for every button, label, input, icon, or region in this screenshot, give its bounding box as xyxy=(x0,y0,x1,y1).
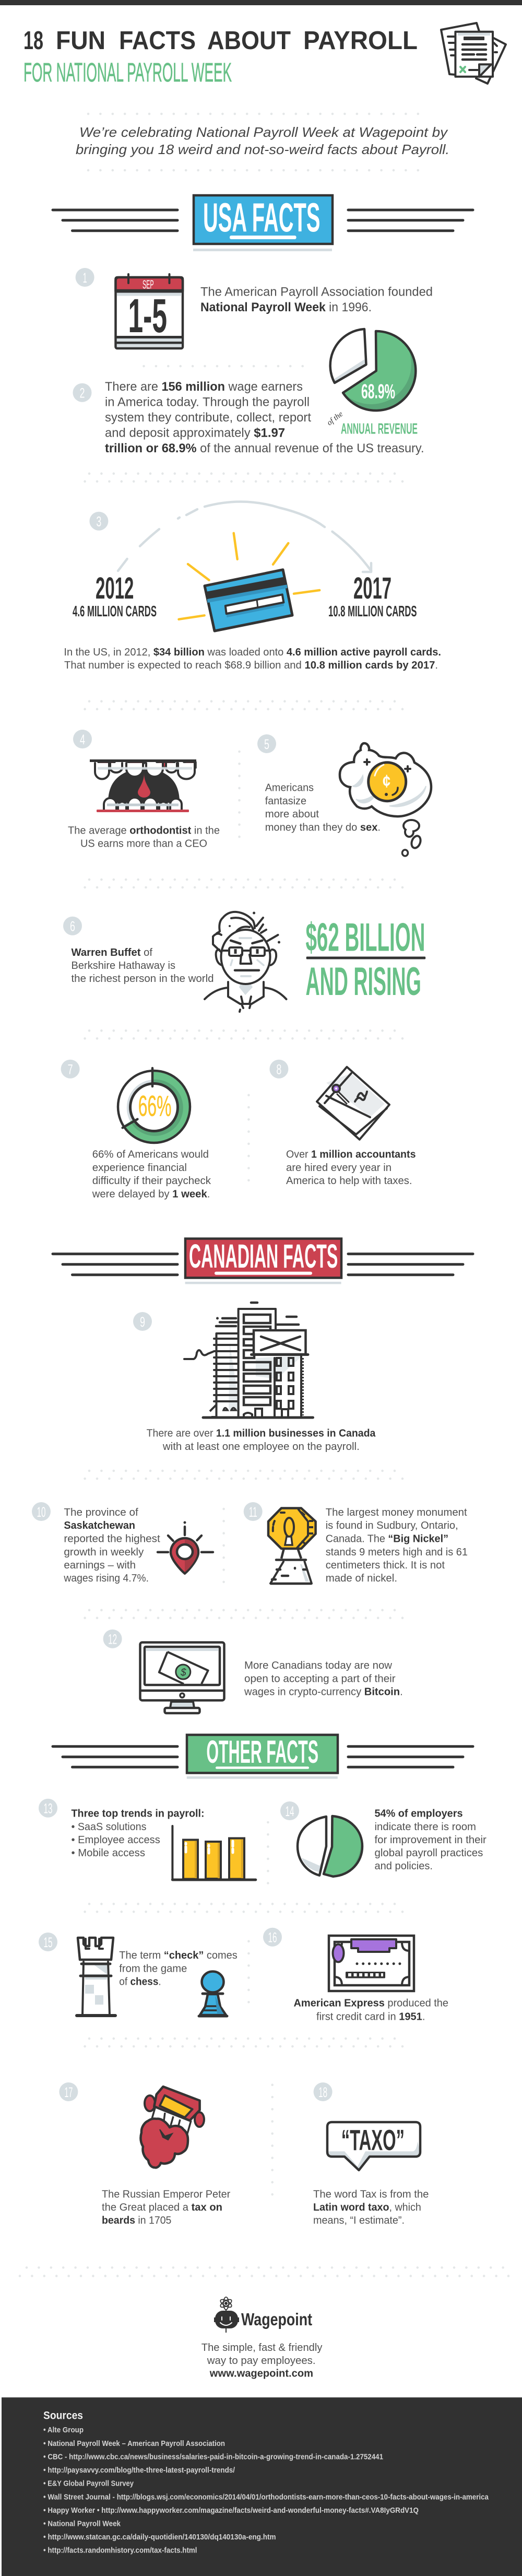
panel: fact 13 xyxy=(39,1799,256,1880)
fact 2 text: system they contribute, collect, report xyxy=(105,411,311,425)
heading: Canadian facts: CANADIAN FACTS xyxy=(189,1237,338,1275)
fact 10 text: The province of xyxy=(64,1506,138,1518)
heading: Canadian facts xyxy=(53,1237,473,1284)
logo: Wagepoint xyxy=(214,2297,312,2333)
chart: pie 68.9%: 68.9% xyxy=(361,381,395,403)
panel: fact 15 xyxy=(39,1933,238,2016)
fact 4 text xyxy=(68,825,220,850)
heading: Other facts: OTHER FACTS xyxy=(206,1734,318,1770)
badge 15: 15 xyxy=(44,1935,52,1950)
title: ABOUT xyxy=(207,27,291,55)
intro text: We’re celebrating National Payroll Week at Wagepoint by xyxy=(79,124,448,140)
icon: monitor with banknote xyxy=(140,1642,224,1713)
top bar xyxy=(0,0,522,5)
badge 6: 6 xyxy=(70,919,75,934)
caption: of the annual revenue: ANNUAL REVENUE xyxy=(341,421,418,438)
icon: office buildings xyxy=(184,1303,313,1418)
fact 17 text xyxy=(102,2188,230,2227)
icon: big nickel monument xyxy=(268,1508,316,1584)
chart: pie 68.9% xyxy=(330,324,416,411)
title xyxy=(23,27,418,55)
fact 16 text: first credit card in 1951. xyxy=(316,2010,425,2022)
fact 3 text: That number is expected to reach $68.9 billion and 10.8 million cards by 2017. xyxy=(64,659,438,671)
panel: fact 4 xyxy=(68,730,220,850)
icon: calendar: SEP xyxy=(143,278,154,291)
fact 2 text: and deposit approximately $1.97 xyxy=(105,426,285,440)
fact 16 text: American Express produced the xyxy=(293,1997,448,2009)
fact 11 text: centimeters thick. It is not xyxy=(326,1559,445,1571)
fact 14 text: and policies. xyxy=(375,1860,433,1872)
arrow: growth arc xyxy=(118,501,371,572)
fact 11 text xyxy=(326,1506,468,1584)
icon: Warren Buffett portrait xyxy=(205,912,286,1012)
icon: monitor with banknote: $ xyxy=(180,1667,186,1678)
fact 11 text: is found in Sudbury, Ontario, xyxy=(326,1519,458,1531)
badge 14: 14 xyxy=(285,1804,294,1819)
icon: speech bubble TAXO: “TAXO” xyxy=(341,2124,405,2157)
badge 4: 4 xyxy=(80,732,85,747)
badge 14 xyxy=(280,1801,299,1820)
panel: fact 14 xyxy=(280,1801,487,1878)
fact 11 text: The largest money monument xyxy=(326,1506,467,1518)
fact 6 text: Warren Buffet of xyxy=(71,946,152,958)
fact 17 text: the Great placed a tax on xyxy=(102,2202,222,2214)
fact 7 text: were delayed by 1 week. xyxy=(92,1188,210,1200)
icon: bearded tsar xyxy=(140,2087,204,2168)
badge 8: 8 xyxy=(276,1062,281,1078)
label: 2017 xyxy=(328,571,417,620)
fact 17 text: The Russian Emperor Peter xyxy=(102,2188,230,2200)
panel: fact 3 xyxy=(64,501,441,671)
fact 7 text: 66% of Americans would xyxy=(92,1149,209,1161)
fact 12 text: open to accepting a part of their xyxy=(244,1672,396,1685)
sources list: • http://www.statcan.gc.ca/daily-quotidien/140130/dq140130a-eng.htm xyxy=(43,2533,276,2542)
sources list: • E&Y Global Payroll Survey xyxy=(43,2479,134,2488)
panel: fact 10 xyxy=(32,1502,213,1584)
panel: fact 16 xyxy=(263,1928,448,2022)
icon: thought cloud with coin: ¢ xyxy=(383,771,390,791)
intro text xyxy=(76,124,449,157)
sources list: • http://paysavvy.com/blog/the-three-latest-payroll-trends/ xyxy=(43,2466,235,2475)
icon: checkbook xyxy=(317,1067,389,1140)
sources list: • CBC - http://www.cbc.ca/news/business/salaries-paid-in-bitcoin-a-growing-trend-in-canada-1.2752441 xyxy=(43,2453,383,2461)
title: 18 xyxy=(23,27,43,55)
fact 15 text: of chess. xyxy=(119,1976,161,1988)
badge 9: 9 xyxy=(140,1314,145,1330)
label: 2012 xyxy=(73,571,157,620)
fact 2 text xyxy=(105,380,424,455)
sources list: • National Payroll Week – American Payroll Association xyxy=(43,2439,225,2448)
fact 13 text: Three top trends in payroll: xyxy=(71,1807,205,1819)
badge 12: 12 xyxy=(108,1632,117,1647)
badge 7: 7 xyxy=(68,1062,73,1078)
badge 8 xyxy=(269,1060,288,1079)
label: 2017: 2017 xyxy=(353,571,392,605)
title: PAYROLL xyxy=(303,27,418,55)
panel: fact 5 xyxy=(257,734,431,856)
badge 5: 5 xyxy=(264,736,269,752)
fact 14 text: for improvement in their xyxy=(375,1834,487,1846)
badge 13 xyxy=(39,1799,57,1818)
chart: donut 66% xyxy=(118,1068,190,1143)
badge 16: 16 xyxy=(268,1930,277,1946)
fact 10 text: earnings – with xyxy=(64,1559,136,1571)
sources list xyxy=(43,2426,489,2555)
panel: fact 17 xyxy=(59,2082,230,2227)
badge 3 xyxy=(89,512,108,531)
fact 3 text xyxy=(64,646,441,671)
fact 1 text xyxy=(200,285,433,314)
fact 15 text: The term “check” comes xyxy=(119,1949,238,1961)
fact 2 text: There are 156 million wage earners xyxy=(105,380,303,394)
fact 5 text: money than they do sex. xyxy=(265,821,381,833)
fact 6 text xyxy=(71,946,214,985)
fact 10 text: Saskatchewan xyxy=(64,1519,135,1531)
panel: fact 8 xyxy=(269,1060,416,1187)
badge 16 xyxy=(263,1928,282,1947)
fact 9 text: There are over 1.1 million businesses in Canada xyxy=(147,1427,376,1439)
fact 14 text: indicate there is room xyxy=(375,1821,476,1833)
fact 1 text: National Payroll Week in 1996. xyxy=(200,300,372,314)
fact 15 text: from the game xyxy=(119,1962,187,1974)
panel: fact 9 xyxy=(133,1303,376,1453)
badge 18: 18 xyxy=(318,2085,327,2100)
label: 2012: 4.6 MILLION CARDS xyxy=(73,603,157,620)
title: FACTS xyxy=(119,27,196,55)
label: 2012: 2012 xyxy=(96,571,134,605)
badge 13: 13 xyxy=(44,1801,52,1817)
logo: Wagepoint: Wagepoint xyxy=(241,2310,312,2329)
panel: fact 18 xyxy=(313,2082,429,2227)
badge 1: 1 xyxy=(83,270,87,286)
fact 4 text: US earns more than a CEO xyxy=(80,838,207,850)
sources heading: Sources xyxy=(43,2409,83,2421)
heading: Other facts xyxy=(53,1734,473,1779)
subtitle: FOR NATIONAL PAYROLL WEEK xyxy=(23,57,232,87)
panel: fact 7 xyxy=(61,1060,211,1200)
icon: thought cloud with coin xyxy=(340,743,431,856)
fact 2 text: in America today. Through the payroll xyxy=(105,395,310,409)
fact 10 text: wages rising 4.7%. xyxy=(63,1572,149,1584)
fact 4 text: The average orthodontist in the xyxy=(68,825,220,837)
fact 5 text: fantasize xyxy=(265,795,306,807)
fact 17 text: beards in 1705 xyxy=(102,2215,171,2227)
panel: fact 12 xyxy=(103,1630,403,1713)
badge 15 xyxy=(39,1933,57,1951)
chart: pie 54% xyxy=(296,1814,363,1878)
fact 13 text: • Employee access xyxy=(71,1834,160,1846)
badge 3: 3 xyxy=(96,514,101,530)
closing tagline xyxy=(201,2341,323,2380)
fact 13 text xyxy=(71,1807,205,1859)
fact 18 text: The word Tax is from the xyxy=(313,2188,429,2200)
fact 9 text: with at least one employee on the payroll. xyxy=(162,1441,360,1453)
fact 11 text: stands 9 meters high and is 61 xyxy=(326,1546,468,1558)
badge 6 xyxy=(63,917,82,935)
chart: donut 66%: 66% xyxy=(138,1090,171,1122)
panel: fact 6 xyxy=(63,912,425,1012)
icon: first credit card certificate xyxy=(329,1936,414,1991)
fact 13 text: • SaaS solutions xyxy=(71,1821,146,1833)
fact 5 text: more about xyxy=(265,808,319,820)
fact 18 text: Latin word taxo, which xyxy=(313,2202,421,2214)
badge 9 xyxy=(133,1312,152,1331)
fact 12 text: wages in crypto-currency Bitcoin. xyxy=(244,1686,403,1698)
badge 7 xyxy=(61,1060,80,1079)
label: 2017: 10.8 MILLION CARDS xyxy=(328,603,417,620)
heading: USA facts: USA FACTS xyxy=(203,194,321,240)
fact 3 text: In the US, in 2012, $34 billion was loaded onto 4.6 million active payroll cards. xyxy=(64,646,441,658)
badge 2 xyxy=(73,383,92,402)
sources list: • Alte Group xyxy=(43,2426,84,2434)
icon: calendar: 1-5 xyxy=(128,289,167,343)
badge 12 xyxy=(103,1630,122,1648)
fact 18 text: means, “I estimate”. xyxy=(313,2215,405,2227)
fact 9 text xyxy=(147,1427,376,1453)
badge 11 xyxy=(244,1502,263,1521)
callout: $62 billion and rising xyxy=(306,916,425,1004)
fact 11 text: Canada. The “Big Nickel” xyxy=(326,1532,448,1545)
caption: of the annual revenue xyxy=(326,410,418,438)
icon: rook xyxy=(77,1938,115,2016)
sources list: • National Payroll Week xyxy=(43,2519,121,2528)
fact 8 text xyxy=(286,1149,416,1187)
fact 12 text xyxy=(244,1659,403,1698)
fact 1 text: The American Payroll Association founded xyxy=(200,285,433,299)
title: FUN xyxy=(56,27,105,55)
fact 5 text: Americans xyxy=(265,782,314,794)
badge 5 xyxy=(257,734,276,753)
badge 10 xyxy=(32,1502,51,1521)
panel: fact 1 xyxy=(76,268,433,348)
intro text: bringing you 18 weird and not-so-weird facts about Payroll. xyxy=(76,142,449,157)
fact 16 text xyxy=(293,1997,448,2022)
fact 13 text: • Mobile access xyxy=(71,1847,145,1859)
fact 8 text: America to help with taxes. xyxy=(286,1175,412,1187)
badge 17 xyxy=(59,2082,78,2101)
icon: map pin xyxy=(158,1521,213,1574)
icon: payroll card xyxy=(179,533,319,631)
icon: mouth with braces xyxy=(90,760,196,812)
icon: documents xyxy=(441,23,506,84)
fact 7 text xyxy=(92,1149,211,1200)
badge 17: 17 xyxy=(64,2085,73,2100)
fact 10 text: growth in weekly xyxy=(64,1546,144,1558)
badge 2: 2 xyxy=(79,385,85,401)
fact 10 text xyxy=(63,1506,160,1584)
fact 14 text: 54% of employers xyxy=(375,1807,462,1819)
badge 18 xyxy=(314,2082,333,2101)
badge 11: 11 xyxy=(249,1504,257,1520)
fact 6 text: the richest person in the world xyxy=(71,973,214,985)
icon: calendar xyxy=(116,274,183,348)
heading: USA facts xyxy=(53,194,473,251)
fact 10 text: reported the highest xyxy=(64,1532,160,1545)
fact 6 text: Berkshire Hathaway is xyxy=(71,959,175,971)
icon: atom head xyxy=(214,2297,239,2333)
icon: pawn xyxy=(199,1971,227,2016)
fact 14 text: global payroll practices xyxy=(375,1847,483,1859)
fact 15 text xyxy=(119,1949,238,1988)
closing tagline: www.wagepoint.com xyxy=(209,2368,313,2380)
closing tagline: way to pay employees. xyxy=(207,2355,316,2367)
fact 11 text: made of nickel. xyxy=(326,1572,397,1584)
panel: sources xyxy=(2,2397,522,2576)
badge 4 xyxy=(73,730,92,748)
fact 8 text: Over 1 million accountants xyxy=(286,1149,416,1161)
badge 10: 10 xyxy=(37,1504,46,1520)
sources list: • Happy Worker • http://www.happyworker.com/magazine/facts/weird-and-wonderful-money-facts#.VA8IyGRdV1Q xyxy=(43,2506,419,2515)
closing tagline: The simple, fast & friendly xyxy=(201,2341,323,2353)
chart: bars xyxy=(172,1826,256,1880)
fact 2 text: trillion or 68.9% of the annual revenue of the US treasury. xyxy=(105,441,424,455)
fact 7 text: experience financial xyxy=(92,1162,187,1174)
fact 5 text xyxy=(265,782,381,833)
badge 1 xyxy=(76,268,94,287)
panel: fact 11 xyxy=(244,1502,468,1584)
fact 12 text: More Canadians today are now xyxy=(244,1659,392,1671)
sources list: • http://facts.randomhistory.com/tax-facts.html xyxy=(43,2546,197,2555)
fact 7 text: difficulty if their paycheck xyxy=(92,1175,211,1187)
fact 14 text xyxy=(375,1807,487,1872)
caption: of the annual revenue: of the xyxy=(326,410,345,427)
icon: speech bubble TAXO xyxy=(327,2122,420,2170)
panel: fact 2 xyxy=(73,324,424,455)
fact 18 text xyxy=(313,2188,429,2227)
fact 8 text: are hired every year in xyxy=(286,1162,392,1174)
